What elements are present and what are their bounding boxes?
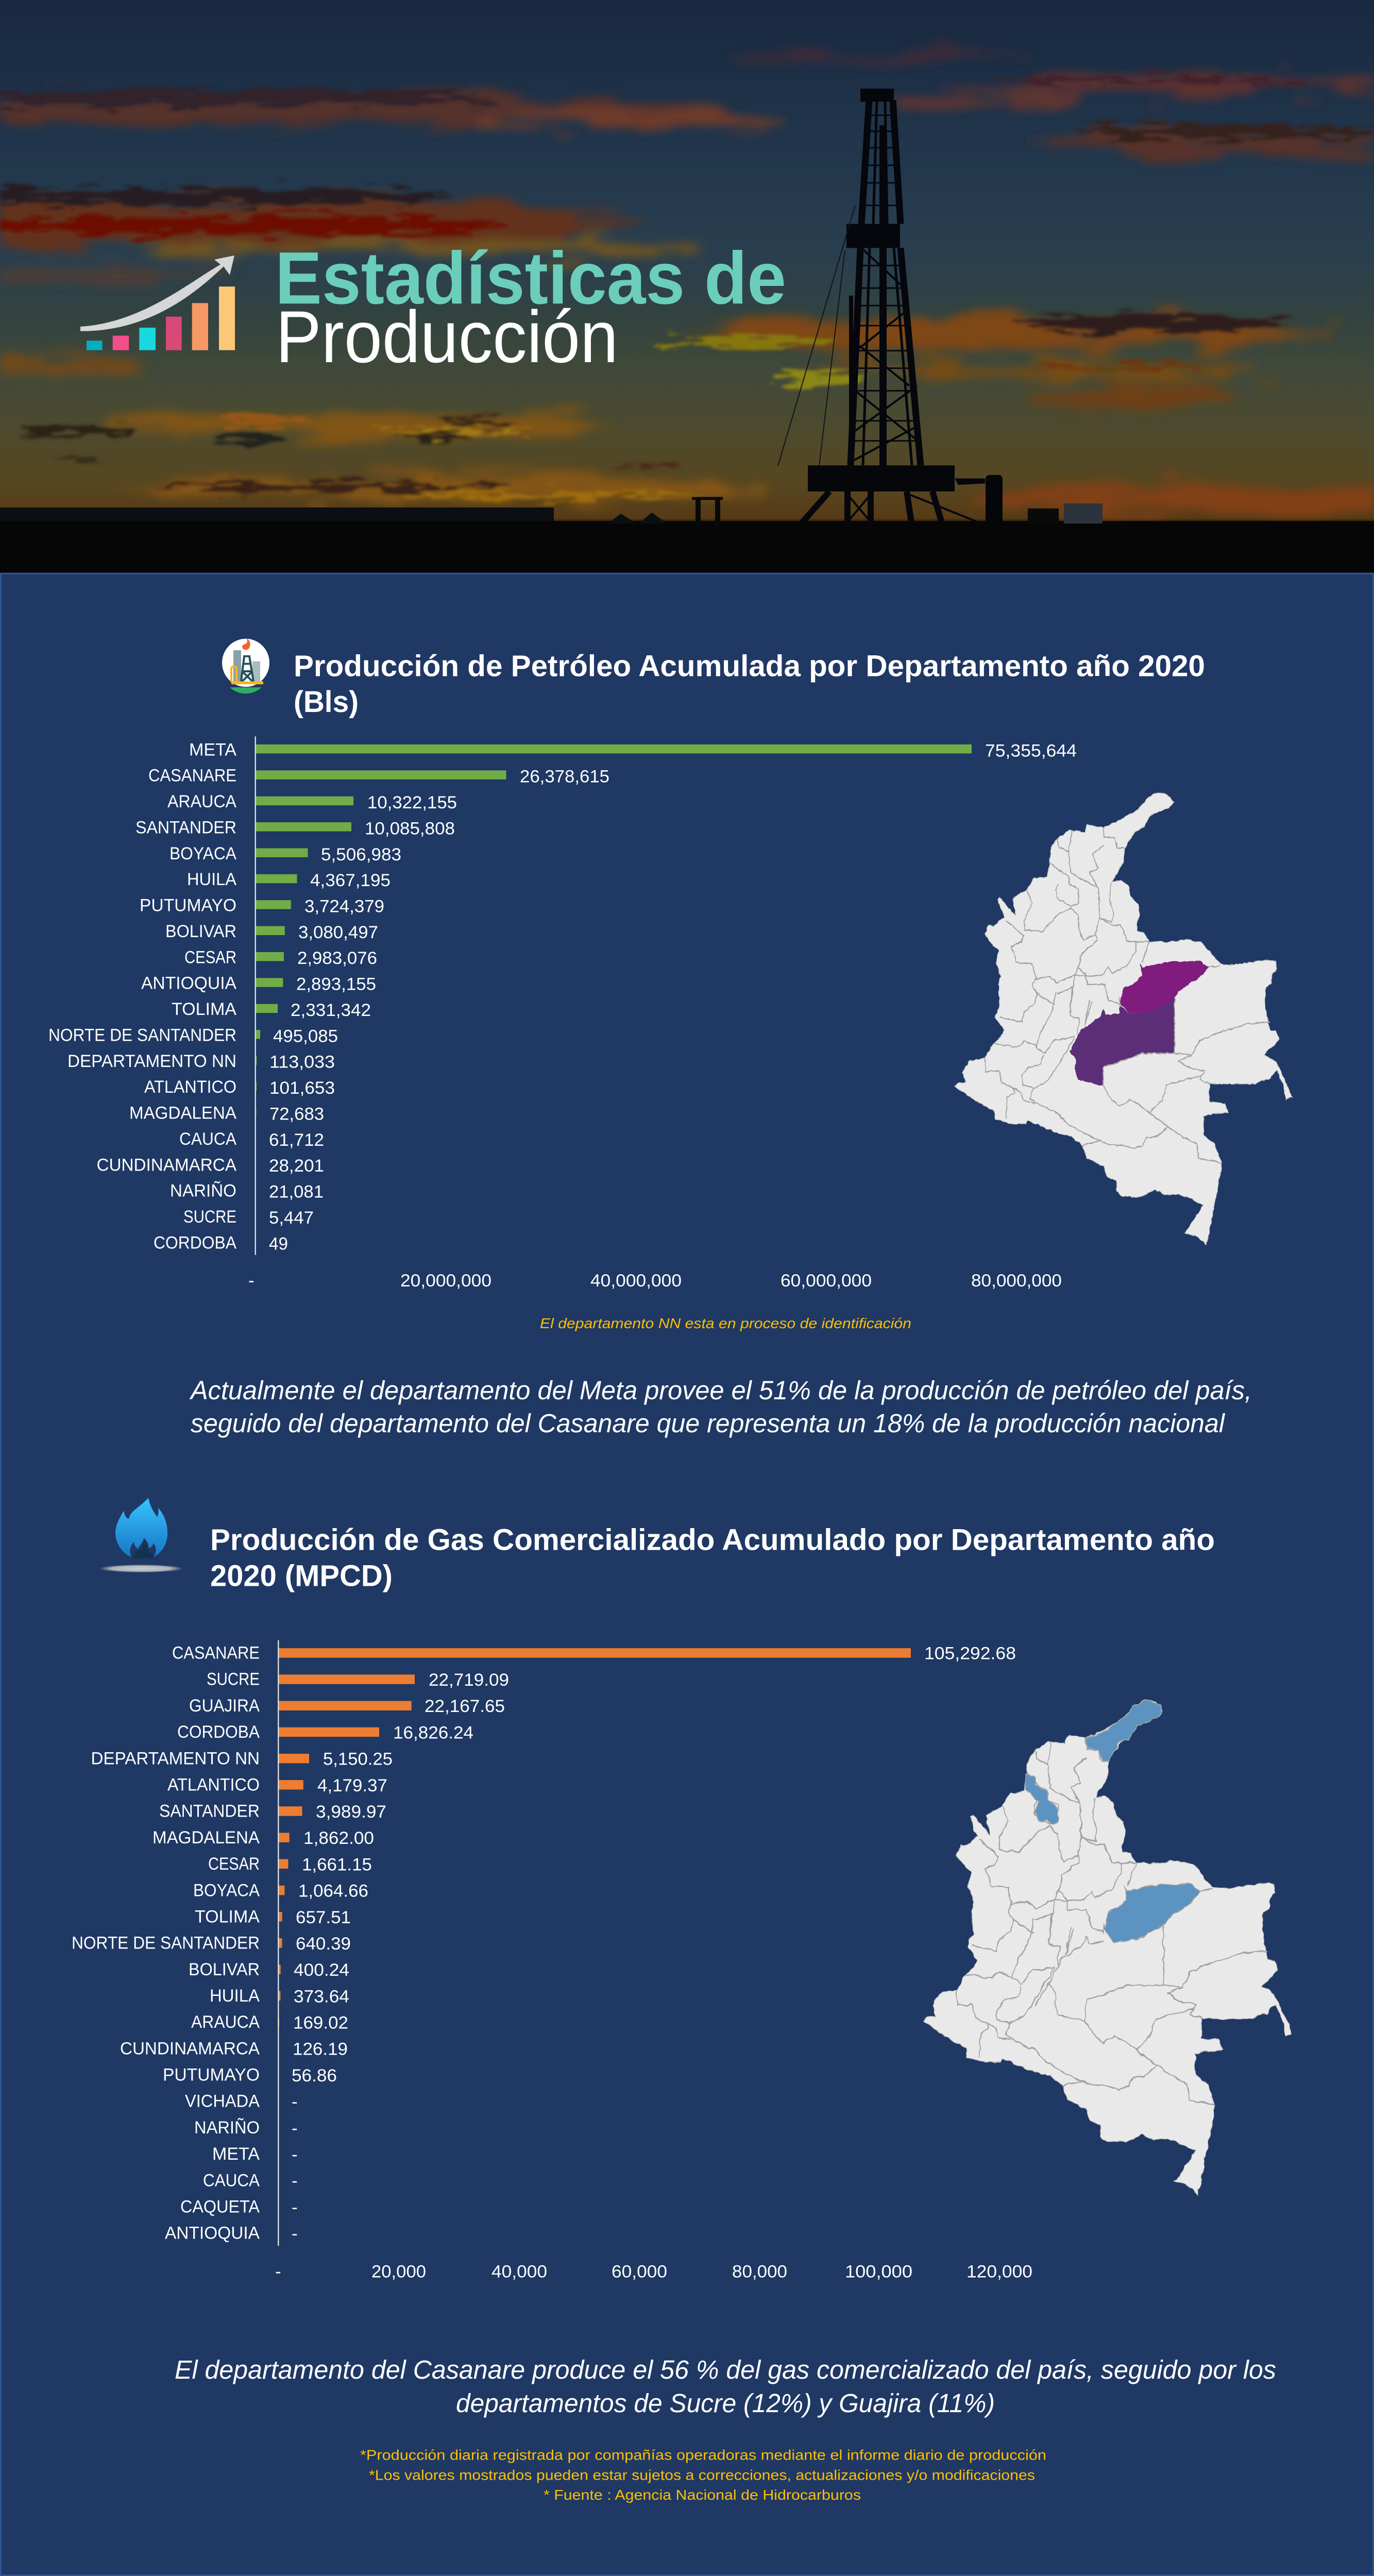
oil chart category labels: SANTANDER [135, 818, 236, 837]
gas chart category labels: TOLIMA [195, 1907, 260, 1926]
icon: gas flame [99, 1498, 183, 1572]
gas chart value labels: 1,862.00 [303, 1829, 374, 1848]
hero banner: oil rig at sunset [0, 0, 1374, 572]
map: Colombia with Meta and Casanare highlighted [955, 793, 1293, 1245]
oil chart value labels: 75,355,644 [985, 741, 1077, 760]
heading: oil production [294, 649, 1205, 719]
oil chart category labels: SUCRE [183, 1207, 236, 1227]
statement: oil production: seguido del departamento del Casanare que representa un 18% de la producción nacional [191, 1409, 1226, 1438]
oil derrick [778, 89, 1003, 526]
gas chart category labels: DEPARTAMENTO NN [91, 1749, 260, 1768]
gas chart category labels: VICHADA [185, 2092, 260, 2111]
oil chart category labels: NARIÑO [170, 1181, 236, 1201]
oil chart category labels: PUTUMAYO [140, 896, 236, 915]
gas chart value labels: 5,150.25 [323, 1750, 393, 1769]
oil chart value labels: 3,724,379 [304, 897, 384, 916]
oil chart horizontal axis labels: 60,000,000 [781, 1272, 872, 1291]
oil chart category labels: CUNDINAMARCA [97, 1156, 236, 1175]
gas chart horizontal axis labels: 60,000 [612, 2262, 667, 2281]
hero logo: rising bars and arrow [80, 256, 235, 350]
gas chart horizontal axis labels: 40,000 [491, 2262, 547, 2281]
gas chart vertical axis [278, 1640, 279, 2246]
gas chart category labels: SUCRE [207, 1670, 260, 1689]
heading: gas production: 2020 (MPCD) [210, 1558, 393, 1592]
oil chart value labels: 3,080,497 [298, 923, 378, 942]
oil chart value labels [269, 741, 1077, 1253]
gas chart value labels: 169.02 [293, 2013, 348, 2032]
footnotes: source notes [360, 2447, 1046, 2503]
oil chart category labels: CESAR [184, 948, 236, 967]
oil chart horizontal axis labels: 20,000,000 [400, 1272, 491, 1291]
gas chart category labels: SANTANDER [159, 1802, 260, 1821]
gas chart category labels: ATLANTICO [167, 1775, 260, 1794]
gas chart value labels: 657.51 [296, 1908, 351, 1927]
oil chart horizontal axis labels: 40,000,000 [590, 1272, 682, 1291]
oil chart category labels [48, 740, 236, 1252]
oil chart value labels: 10,085,808 [365, 819, 455, 838]
oil chart category labels: BOYACA [169, 844, 236, 863]
gas chart bars [278, 1648, 911, 2027]
oil chart value labels: 5,447 [269, 1208, 314, 1228]
icon: oil refinery [222, 638, 269, 693]
department borders [985, 827, 1269, 1163]
oil chart value labels: 10,322,155 [367, 793, 457, 812]
gas chart category labels: NORTE DE SANTANDER [72, 1934, 260, 1953]
oil chart value labels: 49 [269, 1234, 288, 1253]
bar chart: gas production by department [72, 1640, 1032, 2281]
oil chart value labels: 72,683 [269, 1105, 324, 1124]
oil chart horizontal axis labels: 80,000,000 [971, 1272, 1062, 1291]
region: Sucre [1026, 1773, 1059, 1824]
region: Casanare [1119, 961, 1208, 1014]
ground silhouette [0, 507, 554, 521]
gas chart value labels: - [292, 2145, 298, 2164]
gas chart category labels: CESAR [208, 1854, 260, 1874]
hero title: Estadísticas de [275, 236, 786, 319]
region: Casanare [1104, 1884, 1200, 1942]
gas chart value labels: 1,661.15 [302, 1855, 372, 1874]
statement: oil production: Actualmente el departamento del Meta provee el 51% de la producción de petróleo del país, [189, 1376, 1252, 1405]
gas chart value labels: 400.24 [294, 1961, 349, 1980]
oil chart category labels: MAGDALENA [129, 1104, 236, 1123]
oil chart vertical axis [255, 736, 256, 1255]
panel edge [1, 573, 1373, 2575]
oil chart horizontal axis labels: - [248, 1272, 255, 1291]
gas chart category labels: GUAJIRA [189, 1696, 260, 1716]
gas chart value labels: - [292, 2172, 298, 2191]
gas chart value labels: - [292, 2092, 298, 2112]
gas chart category labels: PUTUMAYO [163, 2065, 260, 2084]
gas chart category labels: CORDOBA [177, 1723, 260, 1742]
oil chart value labels: 61,712 [269, 1130, 324, 1150]
gas chart horizontal axis labels: 20,000 [371, 2262, 426, 2281]
gas chart category labels: NARIÑO [194, 2117, 260, 2138]
gas chart value labels: 1,064.66 [298, 1882, 368, 1901]
footnote: department NN: El departamento NN esta en proceso de identificación [540, 1315, 911, 1332]
gas chart value labels: 16,826.24 [393, 1723, 473, 1742]
gas chart category labels: CUNDINAMARCA [120, 2039, 260, 2058]
gas chart horizontal axis labels: 100,000 [845, 2262, 912, 2281]
gas chart value labels: 373.64 [294, 1987, 349, 2006]
oil chart value labels: 2,331,342 [291, 1001, 371, 1020]
gas chart category labels: CAUCA [203, 2171, 260, 2190]
oil chart category labels: ARAUCA [167, 792, 236, 811]
oil chart value labels: 113,033 [269, 1053, 335, 1072]
footnotes: source notes: * Fuente : Agencia Nacional de Hidrocarburos [544, 2487, 861, 2503]
gas chart category labels [72, 1643, 260, 2243]
gas chart value labels: - [292, 2119, 298, 2138]
heading: gas production: Producción de Gas Comercializado Acumulado por Departamento año [210, 1522, 1215, 1556]
oil chart category labels: HUILA [187, 870, 236, 889]
oil chart value labels: 26,378,615 [520, 767, 609, 787]
gas chart category labels: META [212, 2145, 260, 2164]
oil chart value labels: 495,085 [273, 1027, 338, 1046]
gas chart category labels: CAQUETA [180, 2197, 260, 2216]
oil chart category labels: ATLANTICO [144, 1078, 236, 1097]
gas chart category labels: ANTIOQUIA [165, 2224, 260, 2243]
heading: oil production: Producción de Petróleo Acumulada por Departamento año 2020 [294, 649, 1205, 683]
oil chart category labels: DEPARTAMENTO NN [67, 1052, 236, 1071]
gas chart value labels: 126.19 [293, 2040, 348, 2059]
oil chart category labels: META [189, 740, 236, 759]
oil chart category labels: BOLIVAR [165, 922, 236, 941]
oil chart value labels: 5,506,983 [321, 845, 401, 865]
oil chart category labels: NORTE DE SANTANDER [48, 1026, 236, 1045]
gas chart value labels: 22,167.65 [425, 1697, 505, 1716]
hero title: Producción [276, 296, 618, 378]
statement: gas production: El departamento del Casanare produce el 56 % del gas comercializado del país, seguido por los [175, 2355, 1276, 2384]
gas chart value labels: 22,719.09 [429, 1670, 509, 1690]
gas chart category labels: CASANARE [172, 1643, 260, 1663]
oil chart value labels: 2,893,155 [296, 975, 376, 994]
oil chart category labels: CASANARE [148, 766, 236, 786]
gas chart category labels: HUILA [210, 1986, 260, 2006]
oil chart value labels: 101,653 [269, 1079, 335, 1098]
gas chart horizontal axis labels: - [275, 2262, 281, 2281]
gas chart value labels [292, 1644, 1016, 2244]
footnotes: source notes: *Producción diaria registrada por compañías operadoras mediante el informe diario de producción [360, 2447, 1046, 2463]
region: Guajira [1086, 1700, 1163, 1761]
department borders [956, 1738, 1267, 2105]
gas chart category labels: BOYACA [193, 1881, 260, 1900]
statement: gas production [175, 2355, 1276, 2418]
gas chart horizontal axis labels: 120,000 [966, 2262, 1032, 2281]
gas chart value labels: 3,989.97 [316, 1802, 386, 1822]
oil chart category labels: ANTIOQUIA [141, 974, 236, 993]
gas chart value labels: 4,179.37 [317, 1776, 387, 1795]
gas chart value labels: 56.86 [292, 2066, 337, 2086]
bar chart: oil production by department [48, 736, 1077, 1291]
gas chart horizontal axis labels: 80,000 [732, 2262, 787, 2281]
hero title [275, 236, 786, 378]
gas chart value labels: - [292, 2224, 298, 2244]
region: Meta [1070, 998, 1175, 1086]
gas chart category labels: ARAUCA [191, 2013, 260, 2032]
oil chart value labels: 21,081 [269, 1182, 324, 1201]
gas chart value labels: - [292, 2198, 298, 2217]
gas chart category labels: BOLIVAR [189, 1960, 260, 1979]
oil chart horizontal axis labels [248, 1272, 1062, 1291]
gas chart value labels: 640.39 [296, 1934, 351, 1954]
oil chart value labels: 28,201 [269, 1157, 324, 1176]
oil chart value labels: 4,367,195 [310, 871, 391, 890]
gas chart value labels: 105,292.68 [924, 1644, 1016, 1663]
map: Colombia with Casanare, Guajira and Sucre highlighted [924, 1700, 1292, 2195]
statement: oil production [189, 1376, 1252, 1438]
oil chart category labels: CORDOBA [154, 1233, 236, 1252]
gas chart horizontal axis labels [275, 2262, 1032, 2281]
heading: oil production: (Bls) [294, 685, 359, 719]
heading: gas production [210, 1522, 1215, 1592]
oil chart bars [256, 744, 972, 1117]
oil chart category labels: TOLIMA [172, 999, 236, 1019]
oil chart category labels: CAUCA [179, 1129, 236, 1149]
footnotes: source notes: *Los valores mostrados pueden estar sujetos a correcciones, actualizaciones y/o modificaciones [369, 2467, 1035, 2483]
statement: gas production: departamentos de Sucre (12%) y Guajira (11%) [456, 2389, 995, 2418]
gas chart category labels: MAGDALENA [152, 1828, 260, 1848]
oil chart value labels: 2,983,076 [297, 949, 377, 968]
